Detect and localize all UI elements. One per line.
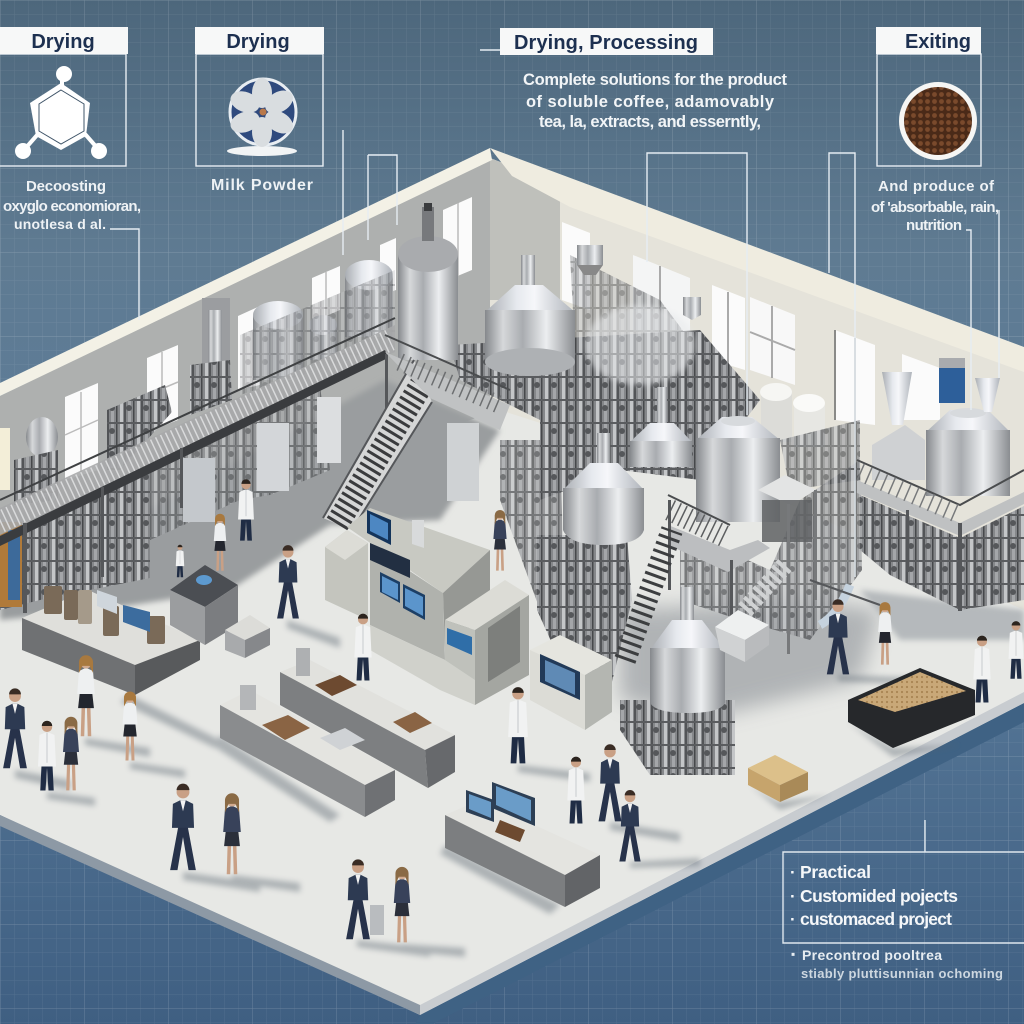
grey cabinet 3: [317, 397, 341, 463]
right platform: [857, 460, 1024, 611]
white drums: [760, 383, 825, 447]
person: [77, 655, 95, 736]
reactor pipework: [240, 270, 395, 395]
floor shade right: [860, 590, 1024, 640]
person: [63, 717, 79, 790]
panel: exiting: [876, 27, 981, 166]
kiosk: [170, 565, 238, 645]
icon: molecule: [15, 66, 107, 159]
panel: milk powder: [195, 27, 324, 166]
person: [1009, 621, 1023, 679]
hopper top 2: [683, 297, 701, 320]
description text: Complete solutions for the product: [523, 71, 788, 89]
panel frame: [783, 820, 1024, 943]
floor: [0, 410, 1024, 1015]
window left wall 6: [380, 238, 396, 296]
sample jars: [44, 586, 165, 644]
icon: coffee bowl: [899, 82, 977, 160]
list text: customaced project: [800, 909, 952, 929]
wall top trim right: [490, 148, 1024, 372]
tank small: [630, 387, 692, 467]
cardboard crate: [748, 755, 808, 802]
pipe cluster central stairs: [680, 460, 862, 640]
bullets: ·: [790, 910, 796, 929]
floor front highlight: [420, 692, 1024, 1015]
support post 1: [23, 523, 27, 613]
heading: Drying, Processing: [514, 32, 698, 54]
central platform: [668, 495, 770, 620]
cyclone right: [975, 378, 1000, 412]
screen right: [403, 584, 425, 620]
floor left edge: [0, 815, 420, 1015]
person: [508, 687, 528, 763]
pipe cluster right under platform: [860, 495, 1024, 610]
person: [973, 636, 991, 703]
reactor 3: [345, 260, 393, 337]
table middle front: [220, 685, 395, 817]
window left wall 2: [65, 383, 98, 480]
pipe cluster left under mezzanine: [0, 470, 150, 610]
window left wall 3: [147, 345, 178, 432]
window left wall 4: [238, 306, 260, 390]
person: [354, 614, 372, 681]
left wall: [0, 158, 490, 640]
pipe cluster top centre: [570, 255, 720, 450]
description text: of soluble coffee, adamovably: [526, 93, 775, 111]
machine tower: [412, 520, 424, 548]
wall top trim left: [0, 148, 492, 396]
window right wall 2: [633, 255, 690, 345]
balusters: [0, 340, 390, 522]
text: exiting description: nutrition: [906, 217, 962, 234]
orange column left: [0, 522, 22, 607]
list text: Practical: [800, 862, 871, 882]
left glass vessel: [26, 417, 58, 457]
panel frame: [196, 54, 323, 166]
heading: Drying: [31, 31, 95, 53]
left dryer drum: [107, 385, 172, 470]
staff figures: [3, 479, 1023, 942]
window left wall 5: [312, 266, 340, 322]
person: [493, 510, 507, 571]
window right wall 3: [712, 285, 745, 370]
right wall: [490, 158, 1024, 640]
window right wall 1: [562, 222, 590, 310]
panel: drying molecule: [0, 27, 128, 166]
reactor 2: [309, 315, 337, 360]
stair landing platform: [385, 335, 510, 430]
person: [214, 514, 226, 571]
table middle back: [280, 648, 455, 788]
frame hopper: [758, 475, 817, 654]
table with sample jars: [22, 590, 200, 695]
person: [346, 859, 370, 939]
large steel tank: [485, 255, 575, 376]
text: exiting description: of 'absorbable, rain,: [871, 199, 999, 216]
tank centre right: [696, 416, 780, 522]
blue column left: [8, 530, 20, 600]
curved duct: [820, 585, 850, 625]
pipe cluster under mezzanine centre: [150, 385, 330, 540]
reactor 1: [253, 301, 303, 380]
window left wall 1: [0, 428, 10, 490]
central control machine: [325, 508, 490, 660]
list text: Customided pojects: [800, 886, 958, 906]
right floor platform back: [780, 420, 860, 490]
window right wall 4: [750, 297, 795, 385]
heading: Drying: [226, 31, 290, 53]
callout leader lines: [110, 50, 999, 577]
person: [238, 479, 254, 541]
operator console: [530, 635, 612, 730]
person: [223, 793, 241, 874]
text: drying description: oxyglo economioran,: [3, 198, 141, 215]
person: [599, 744, 621, 821]
grey cabinet 4: [447, 423, 479, 501]
person: [394, 867, 410, 942]
text: exiting description: And produce of: [878, 178, 995, 195]
support post 3: [180, 448, 183, 508]
person: [619, 790, 641, 861]
left mezzanine walkway: [0, 318, 510, 613]
text: milk powder: Milk Powder: [211, 177, 313, 194]
tank centre: [563, 433, 644, 545]
panel header: [876, 27, 981, 54]
footnote text: Precontrod pooltrea: [802, 947, 942, 963]
floor shade central: [620, 600, 880, 720]
window left wall 7: [443, 197, 472, 282]
hopper top: [577, 245, 603, 275]
tall tank: [398, 203, 458, 360]
description text: [523, 71, 788, 131]
pipe cluster under central platform: [500, 440, 620, 640]
panel frame: [0, 54, 126, 166]
text: drying description: Decoosting: [26, 178, 106, 195]
support post 4: [385, 354, 388, 424]
small cylinder on counter: [370, 905, 384, 935]
window right wall 5: [835, 330, 875, 425]
blue barrel: [939, 358, 965, 403]
screen top: [367, 510, 391, 545]
railing infill: [0, 325, 395, 535]
diagonal chute: [745, 565, 785, 610]
bullets: [790, 863, 796, 929]
screen left: [380, 572, 400, 603]
cyclone unit: [190, 360, 232, 415]
grey cabinet 1: [183, 458, 215, 522]
person: [878, 602, 892, 665]
steam haze: [585, 305, 695, 385]
footnote text: stiably pluttisunnian ochoming: [801, 966, 1003, 981]
front table monitors: [466, 782, 535, 826]
grey cabinet 2: [257, 423, 289, 491]
text: exiting description: [871, 178, 999, 234]
small column vessel: [208, 310, 222, 370]
bullets: ·: [790, 887, 796, 906]
deck edge: [0, 350, 388, 546]
heading: Exiting: [905, 31, 971, 53]
window right wall 6: [902, 354, 940, 420]
front hopper box: [715, 610, 769, 662]
equipment back cluster: [0, 203, 1024, 690]
vertical column: [202, 298, 230, 378]
floor shade under mezzanine: [0, 380, 500, 620]
description text: tea, la, extracts, and esserntly,: [539, 113, 761, 131]
bullets: ·: [790, 863, 796, 882]
machines and work tables: [22, 508, 975, 935]
screen label strip: [370, 543, 410, 578]
left vessel base: [14, 450, 58, 505]
side stairs: [625, 530, 672, 660]
cyclone left: [872, 372, 925, 480]
person: [277, 545, 299, 618]
table front with monitors: [445, 800, 600, 907]
text: drying description: unotlesa d al.: [14, 216, 106, 232]
floor shadows: [15, 620, 960, 957]
text: drying description: [3, 178, 141, 232]
pipe cluster under tank: [537, 535, 632, 690]
footnote text: [791, 947, 1003, 981]
hand rail: [0, 318, 395, 500]
lower right machine: [445, 580, 529, 705]
floor front band: [415, 703, 1024, 1024]
person: [3, 688, 27, 768]
panel header: [195, 27, 324, 54]
small grey unit: [225, 615, 270, 658]
panel frame: [877, 54, 981, 166]
central stair: [323, 360, 432, 530]
floor tank front: [620, 587, 735, 775]
panel header: [500, 28, 713, 55]
list text: [800, 862, 958, 929]
person: [170, 784, 196, 870]
tank right: [926, 408, 1010, 496]
footnote text: ▪: [791, 947, 795, 961]
person: [38, 721, 56, 790]
person: [176, 545, 184, 577]
steel tanks centre and right: [563, 358, 1024, 775]
corner wall shading: [490, 158, 560, 300]
product bin: [848, 668, 975, 748]
counter front of machine: [370, 625, 475, 705]
pipe cluster central right: [450, 330, 760, 500]
support post 2: [101, 487, 104, 577]
panel: practical list: [783, 820, 1024, 981]
person: [567, 757, 585, 824]
panel: drying processing: [500, 28, 788, 131]
table monitors: [97, 590, 150, 632]
person: [122, 692, 138, 760]
panel header: [0, 27, 128, 54]
person: [827, 599, 849, 674]
small pipe rail: [810, 580, 880, 605]
icon: powder disc: [227, 78, 297, 156]
